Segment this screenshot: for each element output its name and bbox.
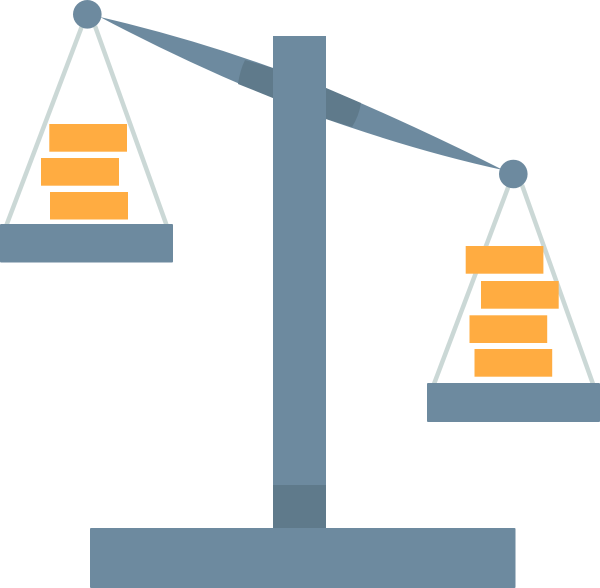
left pivot — [73, 0, 102, 29]
right pivot — [499, 160, 528, 188]
left pan — [0, 224, 173, 262]
right pan — [427, 383, 600, 422]
central post — [273, 36, 326, 528]
scale beam — [100, 17, 503, 170]
left weights — [41, 124, 128, 220]
left pan hanger ropes — [6, 26, 166, 225]
base — [90, 528, 516, 588]
right pan hanger ropes — [434, 185, 593, 384]
right weights — [466, 246, 559, 377]
